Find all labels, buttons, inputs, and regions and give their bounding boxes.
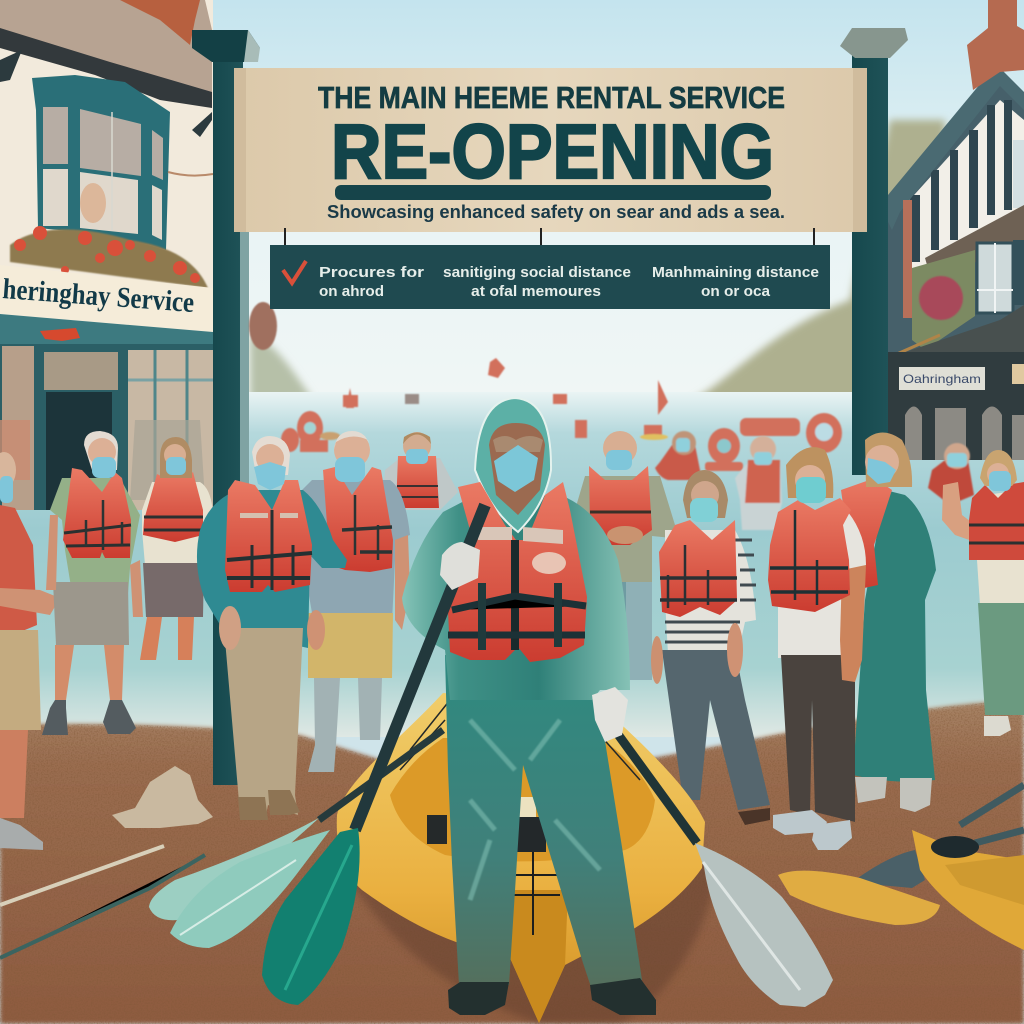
tile roof (925, 205, 1024, 282)
shop sign (0, 265, 213, 332)
suit torso (402, 495, 630, 700)
person: woman in cream shirt (140, 437, 213, 660)
yellow kayak: centre (337, 693, 705, 1023)
hanging flowers (919, 276, 963, 320)
glasses (493, 436, 543, 452)
board item 3: on or oca (701, 283, 771, 300)
building: right tudor house (888, 0, 1024, 460)
yellow kayak and paddles: right (778, 785, 1024, 950)
sky background (0, 0, 1024, 400)
life vest (448, 482, 587, 662)
bay window (32, 75, 170, 250)
board item 1: Procures for (319, 264, 424, 281)
oars on beach left (0, 846, 205, 958)
post: left (192, 30, 260, 785)
hanging board (270, 228, 830, 309)
chimney (120, 0, 200, 45)
person: man in green shirt (42, 431, 143, 735)
building: left shop (0, 0, 213, 510)
main figure (402, 398, 656, 1015)
person: woman in striped shirt (651, 470, 770, 825)
board item 3: Manhmaining distance (652, 264, 819, 281)
person: woman in teal dress (841, 432, 936, 812)
person: man in teal cardigan (197, 436, 347, 820)
board item 1: on ahrod (319, 283, 384, 300)
shopfront (0, 314, 213, 510)
paddle: grey (592, 687, 833, 1007)
shop nameplate (899, 367, 985, 390)
person: far right (942, 450, 1024, 736)
chimney (967, 0, 1024, 90)
glove (440, 542, 480, 590)
flower box (10, 226, 208, 288)
person: far left (0, 452, 60, 850)
hanging basket behind post (249, 302, 277, 350)
suit legs (445, 655, 642, 990)
paddle: green (262, 505, 485, 1005)
person: woman in white shirt (768, 447, 866, 850)
banner title: RE-OPENING (331, 109, 774, 195)
background paddlers on the sea (281, 358, 842, 471)
person: man in olive shirt (575, 431, 675, 680)
kayak shadow (350, 860, 720, 1024)
banner subtitle: Showcasing enhanced safety on sear and ads a sea. (327, 202, 785, 222)
shop nameplate: Oahringham (903, 372, 981, 386)
bunting (168, 172, 213, 176)
distant headlands (250, 120, 945, 420)
sea (0, 392, 1024, 737)
roof (0, 0, 212, 93)
person: back left of centre (383, 432, 458, 510)
post: right (840, 28, 908, 475)
bag on beach (112, 766, 213, 828)
beach (0, 690, 1024, 1024)
icon: check mark (283, 261, 306, 283)
face (489, 423, 545, 515)
paddles: light green pair (149, 730, 443, 948)
banner heading: THE MAIN HEEME RENTAL SERVICE (318, 80, 785, 115)
shop sign: heringhay Service (1, 273, 195, 319)
shoes (448, 978, 656, 1015)
suit highlights (470, 720, 600, 900)
board item 2: sanitiging social distance (443, 264, 631, 281)
title underline (335, 185, 771, 200)
hood (475, 398, 551, 532)
people: background right (655, 431, 974, 530)
person: man in yellow shorts (300, 431, 410, 772)
mask (494, 445, 538, 492)
glove (592, 687, 628, 742)
banner (234, 68, 867, 232)
board item 2: at ofal memoures (471, 283, 601, 300)
